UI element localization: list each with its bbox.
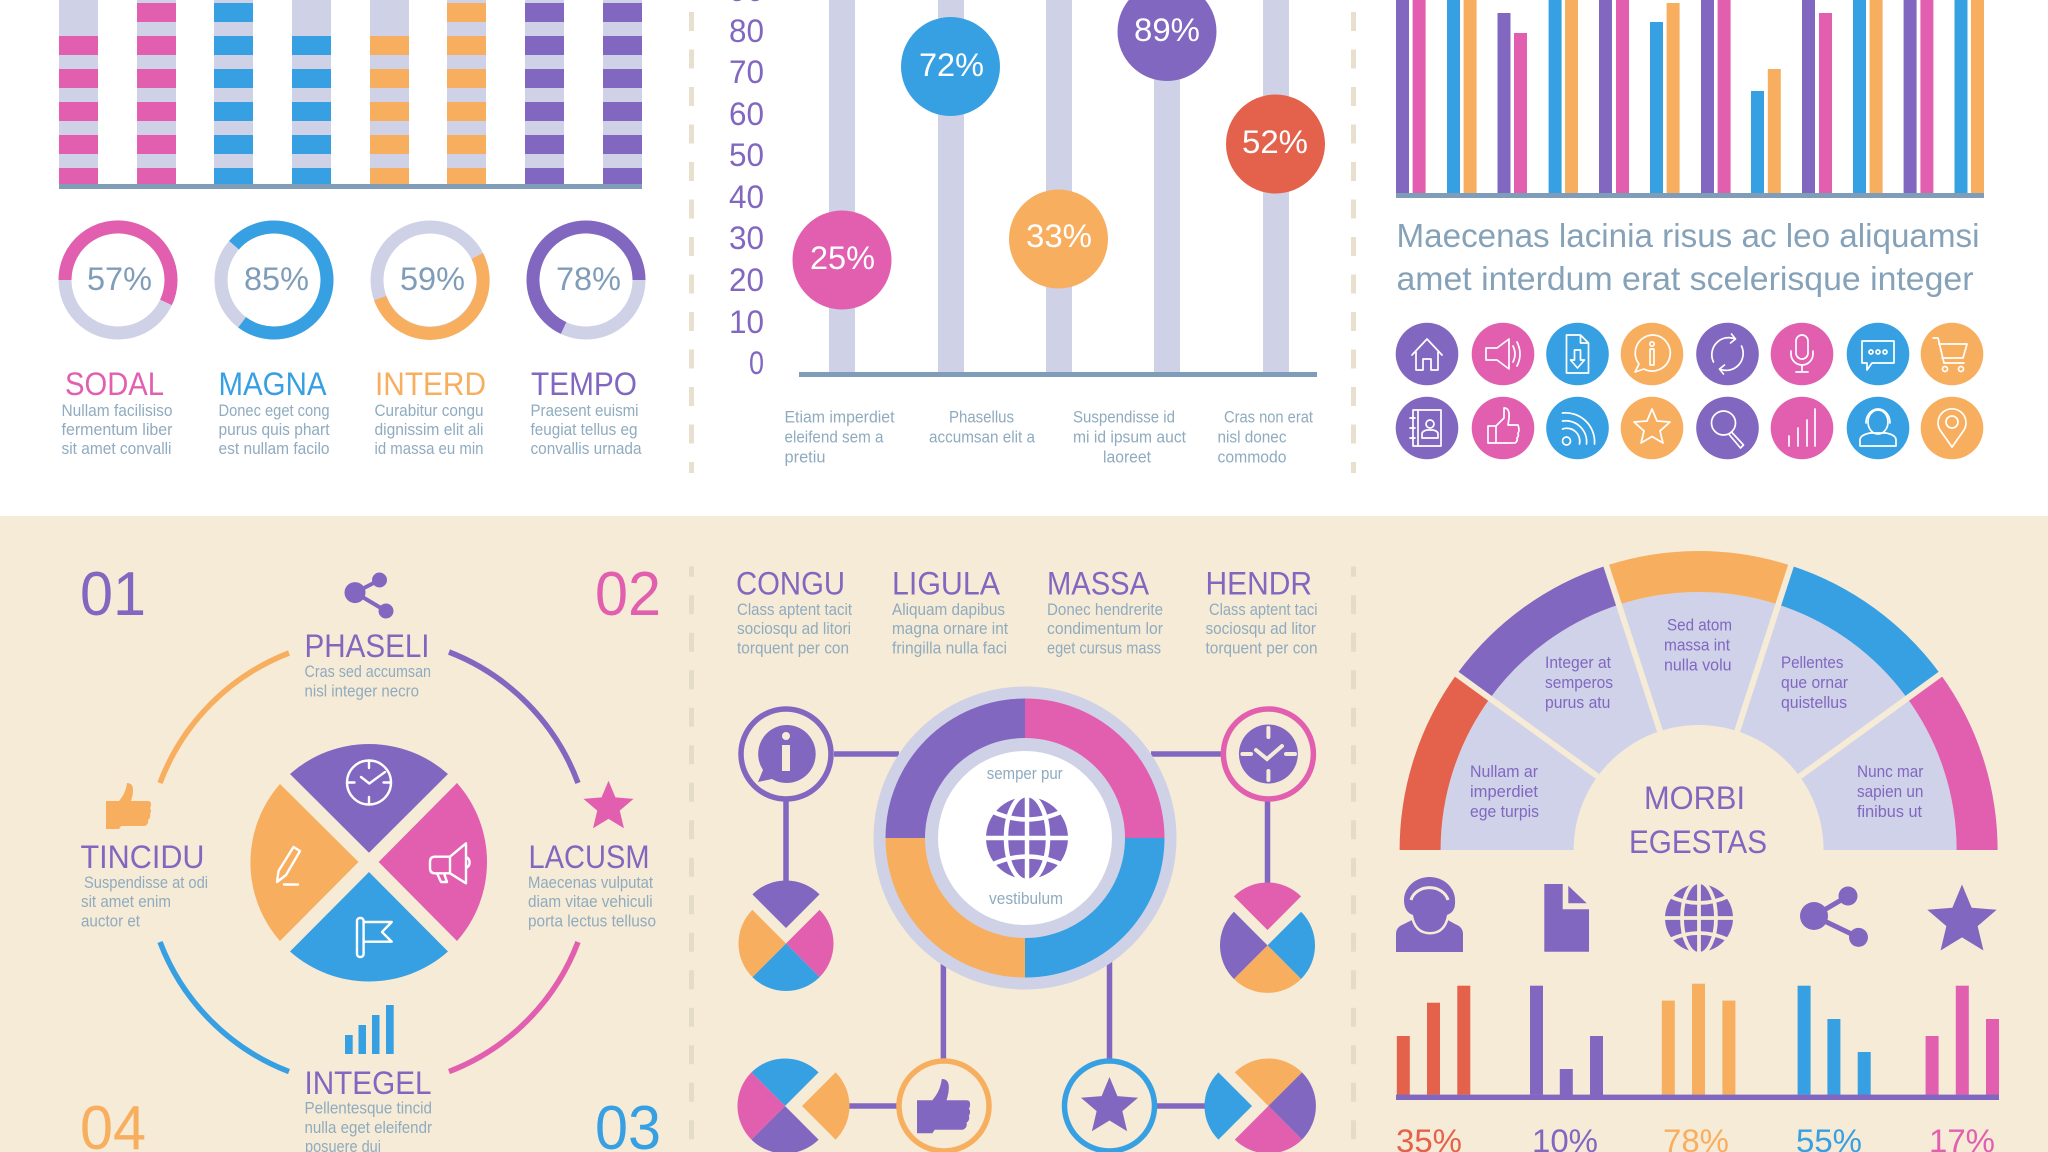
icon: star outline (1621, 397, 1683, 459)
icon: chat (1847, 323, 1909, 385)
column headings (736, 565, 1318, 658)
bubble: 72%: 72% (919, 47, 984, 83)
semicircle gauge: Integer at (1545, 653, 1611, 672)
y axis labels: 10 (729, 304, 764, 340)
text block: SODAL (62, 366, 173, 458)
column headings: fringilla nulla faci (892, 638, 1007, 658)
column headings: HENDR (1206, 565, 1312, 601)
semicircle gauge: purus atu (1545, 693, 1610, 712)
y axis labels: 0 (749, 345, 764, 381)
column headings: Donec hendrerite (1047, 600, 1163, 619)
column captions: Suspendisse id (1073, 408, 1175, 426)
step: INTEGEL: Pellentesque tincid (304, 1098, 432, 1118)
donut: 78%: 78% (556, 261, 621, 297)
step: LACUSM: porta lectus telluso (528, 912, 656, 930)
pie wedge: megaphone (379, 783, 487, 941)
semicircle gauge (1400, 551, 1998, 860)
icon: address book (1396, 397, 1458, 459)
paragraph (1396, 217, 1980, 297)
text block: SODAL: Nullam facilisiso (62, 401, 172, 420)
step: LACUSM (528, 781, 656, 930)
column headings: torquent per con (737, 638, 849, 658)
icon: support agent (1847, 397, 1909, 459)
column headings: MASSA (1047, 565, 1150, 601)
semicircle gauge: ege turpis (1470, 802, 1539, 821)
node: thumbs up (899, 1061, 989, 1151)
text block: SODAL: SODAL (65, 366, 164, 402)
semicircle gauge: Nullam ar (1470, 762, 1538, 781)
node: clock (1223, 709, 1313, 799)
y axis labels: 30 (729, 220, 764, 256)
pie wedge: clock (290, 744, 448, 853)
column captions: Cras non erat (1224, 408, 1313, 426)
paragraph: amet interdum erat scelerisque integer (1396, 260, 1974, 297)
pie wedge: pencil (250, 784, 358, 941)
step: INTEGEL: INTEGEL (304, 1065, 432, 1101)
text block: TEMPO: Praesent euismi (530, 401, 638, 420)
text block: INTERD: INTERD (375, 366, 486, 402)
donut: 85%: 85% (244, 261, 309, 297)
semicircle gauge: Sed atom (1667, 616, 1732, 634)
column captions: mi id ipsum auct (1073, 428, 1186, 446)
step: LACUSM: diam vitae vehiculi (528, 892, 653, 911)
icon: location pin (1921, 397, 1983, 459)
bubble: 25%: 25% (810, 240, 875, 276)
icon: person with headset (1396, 877, 1463, 952)
icon: star (1927, 884, 1997, 951)
text block: MAGNA: MAGNA (218, 366, 327, 402)
y axis labels: 70 (729, 54, 764, 90)
bubble: 89%: 89% (1134, 12, 1200, 48)
icon: info bubble (1621, 323, 1683, 385)
bubble: 52%: 52% (1242, 124, 1308, 160)
y axis labels: 50 (729, 137, 764, 173)
grouped bar chart (1396, 0, 1984, 198)
step: TINCIDU: sit amet enim (81, 892, 171, 911)
icon: cart (1921, 323, 1983, 385)
step: TINCIDU: auctor et (81, 912, 140, 930)
text block: MAGNA: est nullam facilo (218, 439, 330, 458)
columns and axis (799, 0, 1317, 377)
icon: signal bars (1771, 397, 1833, 459)
step: INTEGEL (304, 1005, 432, 1152)
icon: share (1800, 886, 1868, 947)
striped bar chart (59, 0, 642, 189)
text block: TEMPO (530, 366, 642, 458)
semicircle gauge: quistellus (1781, 693, 1847, 712)
icon: refresh (1696, 323, 1759, 385)
percent labels (1396, 1123, 1995, 1152)
icon: globe (984, 795, 1070, 881)
icon: document (1544, 884, 1589, 952)
mini pie: bottom left (737, 1058, 850, 1152)
panel: four step cycle (80, 560, 661, 1152)
bubble: 33% (1009, 190, 1108, 288)
text block: INTERD: dignissim elit ali (374, 420, 484, 439)
node: info (741, 709, 831, 799)
paragraph: Maecenas lacinia risus ac leo aliquamsi (1396, 217, 1980, 254)
semicircle gauge: nulla volu (1664, 655, 1732, 674)
connectors (786, 754, 1268, 1106)
column headings: eget cursus mass (1047, 638, 1161, 658)
donut: 57%: 57% (87, 261, 152, 297)
numbers (80, 560, 661, 1152)
column headings: condimentum lor (1047, 619, 1163, 638)
semicircle gauge: MORBI (1644, 780, 1745, 816)
icon: rss (1546, 397, 1609, 459)
bar groups (1396, 984, 1999, 1100)
step: LACUSM: LACUSM (528, 839, 650, 875)
text block: TEMPO: convallis urnada (530, 439, 642, 458)
text block: INTERD: Curabitur congu (374, 401, 484, 420)
icon: speaker (1472, 323, 1534, 385)
y axis labels: 20 (729, 262, 764, 298)
semicircle gauge: finibus ut (1857, 802, 1922, 821)
column captions: laoreet (1103, 448, 1151, 466)
semicircle gauge: imperdiet (1470, 782, 1538, 801)
column captions: commodo (1218, 448, 1286, 466)
panel: lollipop chart (729, 0, 1325, 466)
text block: MAGNA: purus quis phart (218, 420, 330, 439)
column headings: magna ornare int (892, 619, 1008, 638)
column captions: nisl donec (1218, 428, 1287, 446)
y axis labels: 40 (729, 179, 764, 215)
column headings: Class aptent taci (1209, 600, 1318, 619)
panel: striped bars and donuts (59, 0, 642, 458)
column headings: LIGULA (892, 565, 1001, 601)
bubble: 72% (901, 17, 1000, 116)
column captions (784, 408, 1313, 466)
icon: globe (1663, 882, 1735, 954)
panel: grouped bars and icon grid (1396, 0, 1984, 459)
text block: TEMPO: feugiat tellus eg (530, 420, 638, 439)
step: PHASELI: PHASELI (304, 628, 430, 664)
mini pie: top right (1220, 882, 1315, 993)
text block: TEMPO: TEMPO (531, 366, 637, 402)
panel: semicircle and bars (1396, 551, 1999, 1152)
column captions: eleifend sem a (784, 428, 884, 446)
outer ring arcs (160, 652, 578, 1072)
central donut (874, 686, 1176, 990)
text block: MAGNA: Donec eget cong (218, 401, 330, 420)
numbers: 01 (80, 560, 146, 629)
column headings: sociosqu ad litor (1206, 619, 1316, 638)
step: TINCIDU: Suspendisse at odi (84, 873, 208, 892)
bubble: 33%: 33% (1026, 218, 1092, 254)
text block: INTERD: id massa eu min (374, 439, 484, 458)
icon: microphone (1771, 323, 1833, 385)
step: PHASELI (304, 574, 431, 701)
mini pie: top left (738, 880, 834, 991)
column captions: accumsan elit a (929, 428, 1035, 446)
icon: thumbs up outline (1472, 397, 1534, 459)
text block: MAGNA (218, 366, 330, 458)
step: TINCIDU: TINCIDU (80, 839, 204, 875)
y axis labels (729, 0, 764, 381)
bubble: 89% (1118, 0, 1216, 81)
node: star (1064, 1061, 1154, 1151)
semicircle gauge: Pellentes (1781, 653, 1843, 672)
column headings: sociosqu ad litori (737, 619, 851, 638)
y axis labels: 60 (729, 96, 764, 132)
text block: SODAL: sit amet convalli (62, 439, 172, 458)
bubble: 25% (792, 210, 892, 310)
column captions: pretiu (784, 448, 826, 466)
column headings: torquent per con (1206, 638, 1318, 658)
icon: document download (1546, 323, 1609, 385)
semicircle gauge: Nunc mar (1857, 762, 1924, 781)
donut: 59%: 59% (400, 261, 465, 297)
y axis labels: 80 (729, 13, 764, 49)
text block: INTERD (374, 366, 486, 458)
pie wedge: flag (290, 872, 448, 982)
icon: home (1396, 323, 1458, 385)
numbers: 02 (595, 560, 661, 629)
step: TINCIDU (80, 783, 208, 930)
central donut: semper pur (987, 764, 1063, 783)
icon: search (1696, 397, 1759, 459)
text block: SODAL: fermentum liber (62, 420, 173, 439)
donut: 59% (377, 227, 483, 333)
semicircle gauge: que ornar (1781, 673, 1848, 692)
mini pie: bottom right (1204, 1058, 1316, 1152)
column captions: Etiam imperdiet (784, 408, 895, 426)
semicircle gauge: EGESTAS (1629, 824, 1767, 860)
column headings: Aliquam dapibus (892, 600, 1005, 619)
column headings: CONGU (736, 565, 845, 601)
step: INTEGEL: nulla eget eleifendr (304, 1118, 432, 1137)
semicircle gauge: massa int (1664, 636, 1730, 655)
donut: 57% (65, 227, 171, 333)
step: LACUSM: Maecenas vulputat (528, 873, 653, 892)
panel: hub and spoke diagram (736, 565, 1318, 1152)
step: PHASELI: Cras sed accumsan (304, 662, 431, 681)
column captions: Phasellus (949, 408, 1014, 426)
column headings: Class aptent tacit (737, 600, 852, 619)
donut: 85% (221, 227, 327, 333)
semicircle gauge: semperos (1545, 673, 1613, 692)
semicircle gauge: sapien un (1857, 782, 1923, 801)
central donut: vestibulum (989, 889, 1063, 908)
step: PHASELI: nisl integer necro (304, 682, 419, 701)
donut: 78% (533, 227, 639, 333)
bubble: 52% (1226, 94, 1325, 194)
